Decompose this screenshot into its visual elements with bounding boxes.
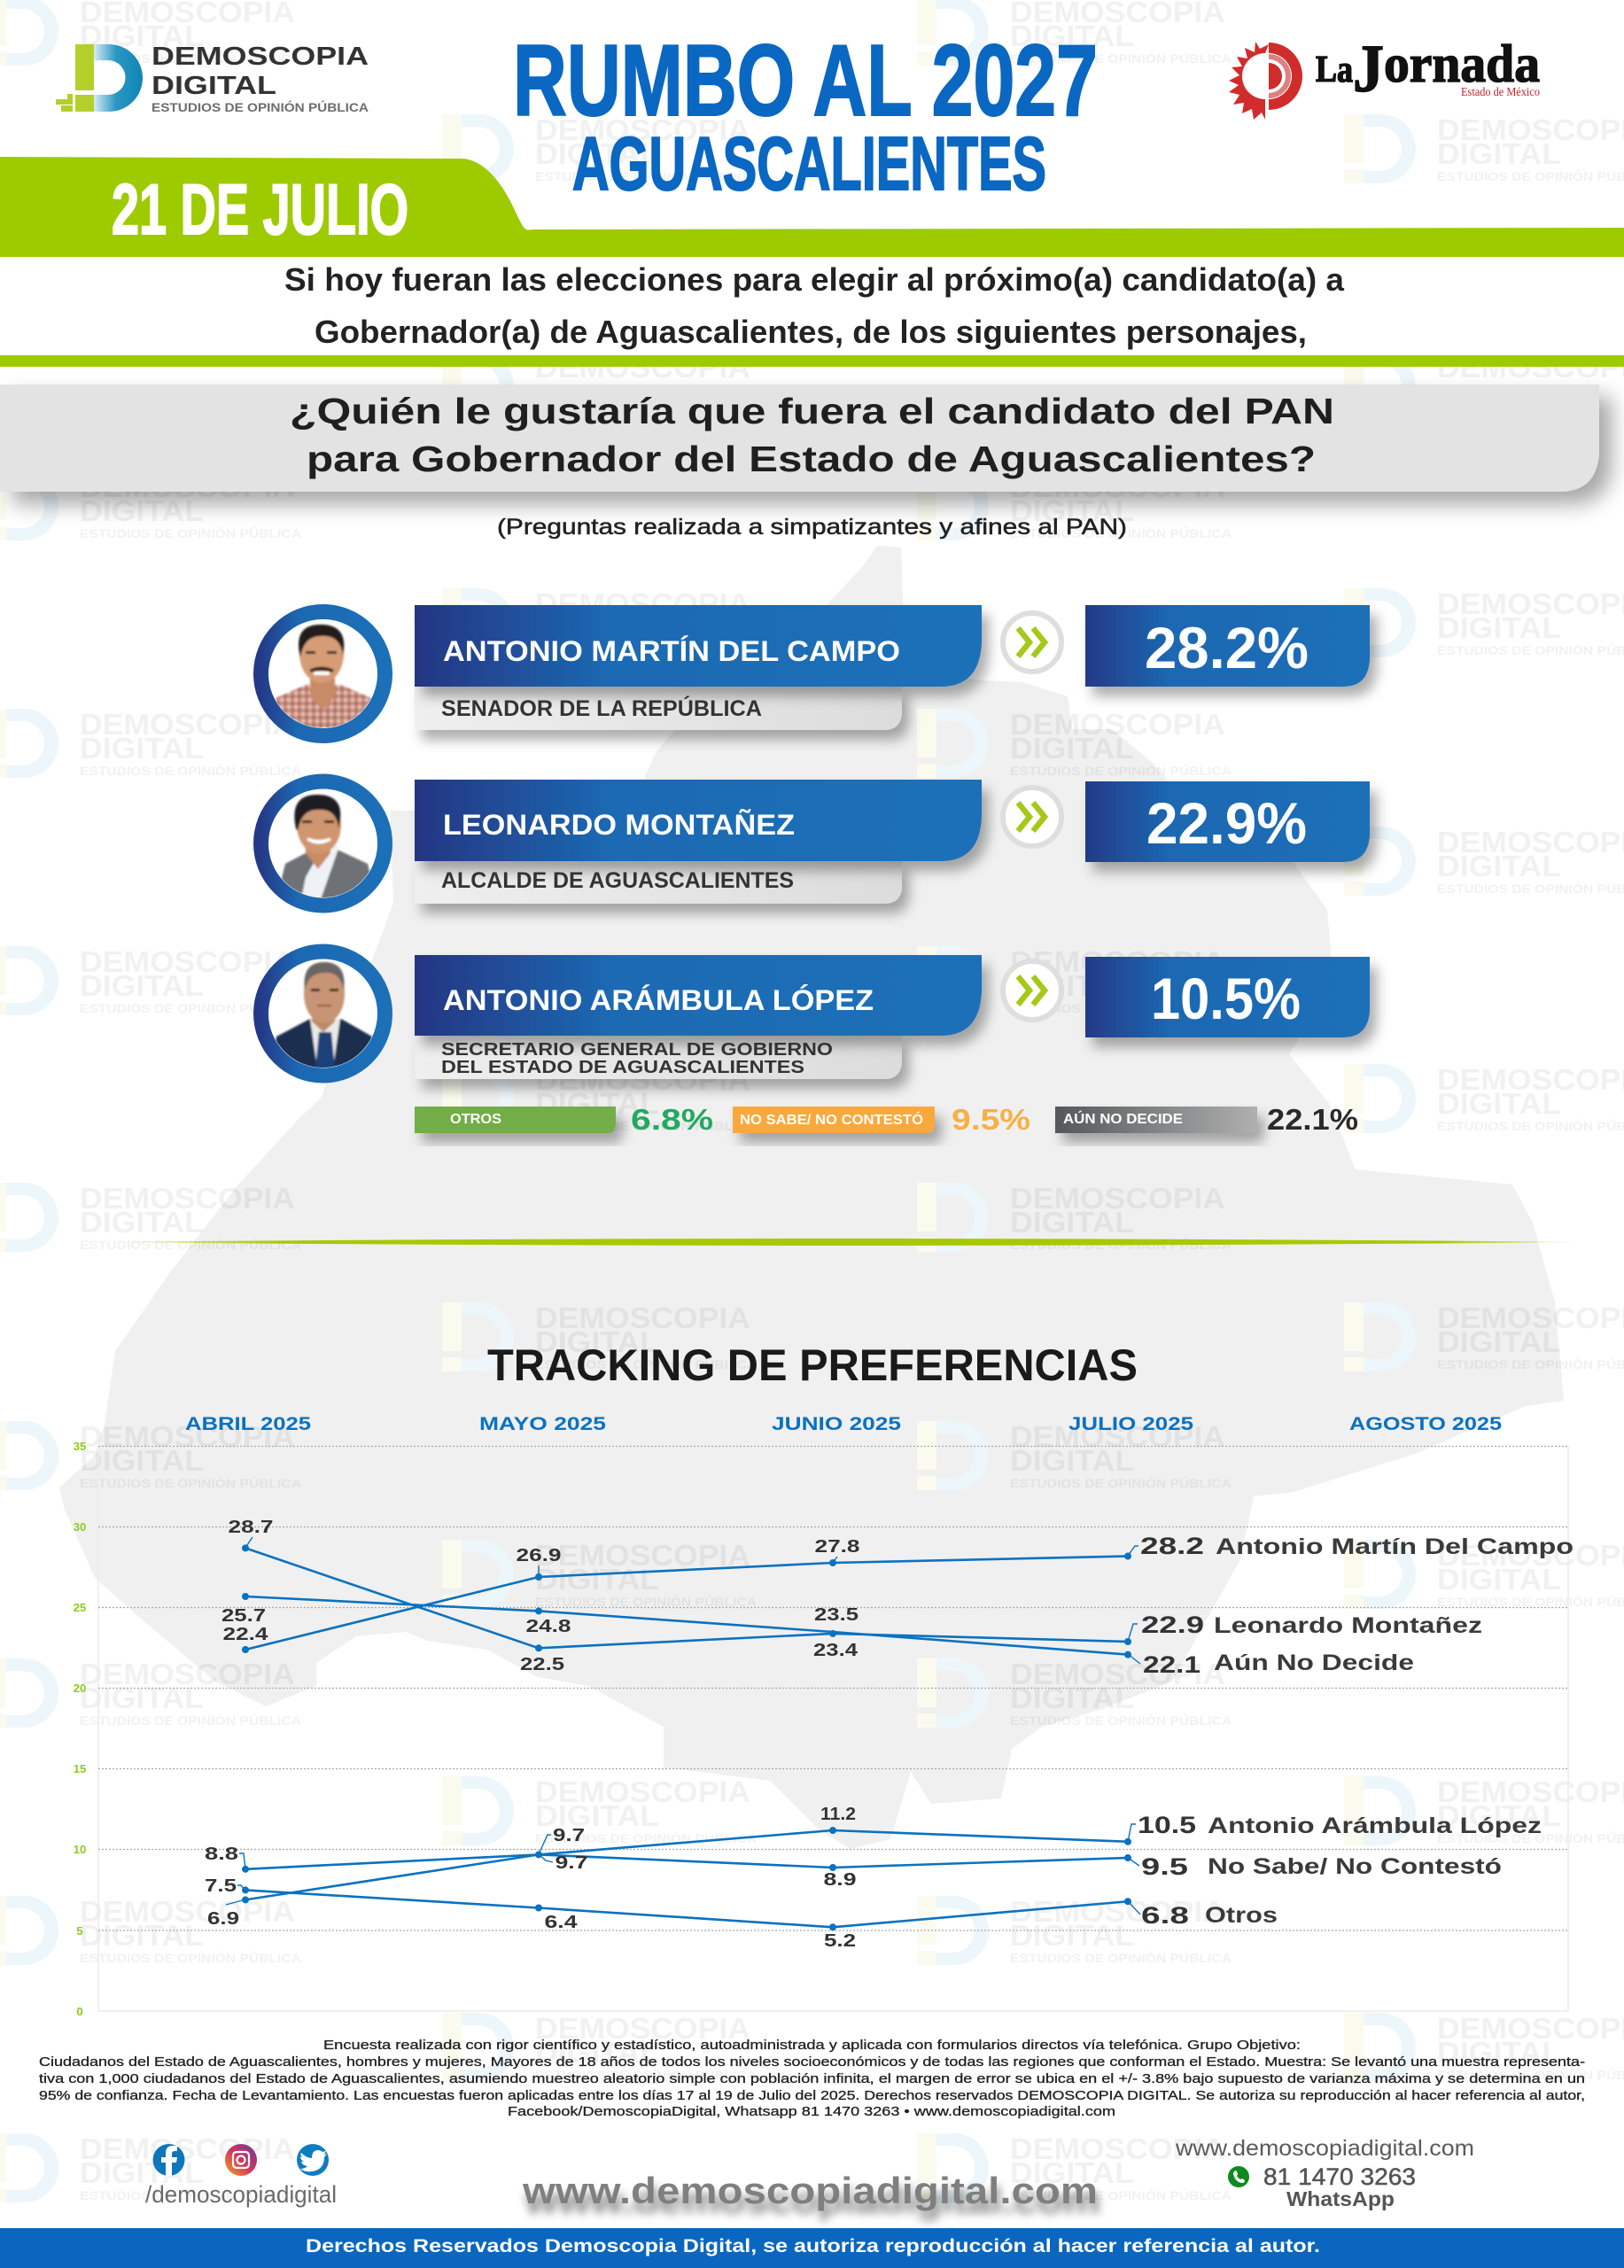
methodology note — [39, 2039, 1585, 2119]
text: ESTUDIOS DE OPINIÓN PÚBLICA — [80, 50, 301, 66]
date: 21 DE JULIO — [112, 170, 408, 250]
percentage — [1085, 957, 1370, 1037]
intro text: Gobernador(a) de Aguascalientes, de los siguientes personajes, — [315, 314, 1307, 350]
text: DIGITAL — [1437, 850, 1561, 882]
text: DIGITAL — [80, 2156, 204, 2189]
percentage — [1085, 605, 1370, 687]
series labels: 28.2 — [1140, 1533, 1204, 1559]
date tab and green band — [0, 157, 1624, 257]
text: DIGITAL — [535, 611, 659, 644]
text: ESTUDIOS DE OPINIÓN PÚBLICA — [1010, 1475, 1232, 1490]
otros — [415, 1103, 713, 1136]
y axis labels: 10 — [74, 1843, 86, 1856]
other responses legend — [415, 1103, 1358, 1136]
percentage: 10.5% — [1151, 966, 1301, 1031]
text: DIGITAL — [1437, 2036, 1561, 2069]
percentage: 28.2% — [1145, 615, 1309, 680]
logo: Demoscopia Digital: DIGITAL — [152, 72, 276, 100]
month headers: JULIO 2025 — [1068, 1414, 1193, 1434]
question text: ¿Quién le gustaría que fuera el candidato del PAN — [290, 391, 1334, 431]
text: DIGITAL — [1010, 19, 1134, 52]
aun no decide: AÚN NO DECIDE — [1063, 1110, 1183, 1127]
otros: 6.8% — [631, 1103, 713, 1136]
text: DEMOSCOPIA — [1010, 1182, 1225, 1215]
text: ESTUDIOS DE OPINIÓN PÚBLICA — [535, 642, 757, 657]
name bar: ANTONIO ARÁMBULA LÓPEZ — [443, 984, 874, 1016]
text: ESTUDIOS DE OPINIÓN PÚBLICA — [1010, 1950, 1232, 1965]
logo: Demoscopia Digital — [56, 43, 369, 114]
text: DEMOSCOPIA — [1010, 2132, 1225, 2165]
chevron icon — [1003, 613, 1061, 672]
text: ESTUDIOS DE OPINIÓN PÚBLICA — [1010, 2187, 1232, 2202]
text: DIGITAL — [535, 1799, 659, 1832]
chevron icon — [1003, 961, 1061, 1020]
text: ESTUDIOS DE OPINIÓN PÚBLICA — [80, 1713, 301, 1728]
series labels: Leonardo Montañez — [1214, 1613, 1482, 1638]
name bar — [415, 780, 982, 904]
data labels: 23.4 — [813, 1641, 859, 1660]
text: DEMOSCOPIA — [535, 1301, 750, 1334]
text: DEMOSCOPIA — [535, 1539, 750, 1572]
text: ESTUDIOS DE OPINIÓN PÚBLICA — [80, 1237, 301, 1252]
text: DIGITAL — [1437, 1799, 1561, 1832]
name bar — [415, 605, 982, 730]
logo: Demoscopia Digital: DEMOSCOPIA — [152, 43, 369, 71]
text: DEMOSCOPIA — [535, 1063, 750, 1096]
month headers: AGOSTO 2025 — [1349, 1414, 1502, 1434]
text: DIGITAL — [1010, 1444, 1134, 1477]
name bar: DEL ESTADO DE AGUASCALIENTES — [441, 1058, 804, 1077]
text: DEMOSCOPIA — [80, 2132, 295, 2165]
text: DIGITAL — [535, 137, 659, 170]
contact block — [1175, 2136, 1474, 2210]
series labels: 10.5 — [1138, 1812, 1196, 1838]
logo: La Jornada — [1229, 32, 1540, 120]
text: DIGITAL — [1010, 1206, 1134, 1239]
text: DIGITAL — [80, 494, 204, 527]
text: DEMOSCOPIA — [535, 1775, 750, 1808]
icon: whatsapp — [1228, 2166, 1249, 2187]
data labels: 27.8 — [815, 1537, 859, 1557]
text: DIGITAL — [535, 2036, 659, 2069]
portrait: Antonio Arámbula López — [260, 951, 385, 1076]
text: DIGITAL — [80, 1682, 204, 1714]
logo: Demoscopia Digital: ESTUDIOS DE OPINIÓN PÚBLICA — [152, 99, 369, 114]
text: DEMOSCOPIA — [80, 945, 295, 978]
data labels: 22.4 — [223, 1625, 269, 1644]
data labels: 8.9 — [824, 1870, 856, 1890]
text: ESTUDIOS DE OPINIÓN PÚBLICA — [1010, 525, 1232, 540]
data labels: 9.7 — [555, 1853, 588, 1873]
series labels: Antonio Martín Del Campo — [1216, 1534, 1573, 1559]
series labels: 6.8 — [1141, 1902, 1189, 1929]
social icons — [152, 2144, 329, 2176]
text: ESTUDIOS DE OPINIÓN PÚBLICA — [1010, 50, 1232, 66]
footer bar — [0, 2228, 1624, 2268]
social handle: /demoscopiadigital — [145, 2181, 337, 2208]
intro text: Si hoy fueran las elecciones para elegir al próximo(a) candidato(a) a — [284, 261, 1345, 298]
y axis labels: 35 — [74, 1440, 86, 1453]
text: DIGITAL — [535, 1325, 659, 1358]
text: DIGITAL — [1010, 494, 1134, 527]
percentage — [1085, 781, 1370, 862]
text: ESTUDIOS DE OPINIÓN PÚBLICA — [535, 2067, 757, 2082]
text: DEMOSCOPIA — [1010, 1895, 1225, 1928]
text: DEMOSCOPIA — [535, 587, 750, 620]
month headers: ABRIL 2025 — [185, 1414, 311, 1434]
text: DIGITAL — [535, 1563, 659, 1596]
data labels: 9.7 — [553, 1826, 585, 1845]
text: ESTUDIOS DE OPINIÓN PÚBLICA — [1010, 1000, 1232, 1015]
text: DEMOSCOPIA — [80, 1658, 295, 1690]
series labels: Aún No Decide — [1214, 1651, 1414, 1675]
question text: para Gobernador del Estado de Aguascalientes? — [307, 439, 1316, 479]
text: ESTUDIOS DE OPINIÓN PÚBLICA — [80, 1950, 301, 1965]
name bar — [415, 955, 982, 1079]
data labels: 8.8 — [205, 1845, 238, 1864]
text: ESTUDIOS DE OPINIÓN PÚBLICA — [535, 168, 757, 183]
text: ESTUDIOS DE OPINIÓN PÚBLICA — [80, 2187, 301, 2202]
logo: La Jornada: La — [1316, 50, 1353, 90]
series labels: Otros — [1205, 1903, 1278, 1928]
text: ESTUDIOS DE OPINIÓN PÚBLICA — [535, 881, 757, 896]
no sabe — [733, 1103, 1030, 1136]
text: DIGITAL — [535, 1087, 659, 1120]
series labels: 22.1 — [1143, 1651, 1201, 1678]
text: DIGITAL — [1437, 1087, 1561, 1120]
data labels: 5.2 — [824, 1931, 856, 1951]
question text — [290, 391, 1334, 479]
website large: www.demoscopiadigital.com — [522, 2170, 1098, 2211]
data labels: 28.7 — [229, 1518, 273, 1537]
portrait: Antonio Martín del Campo — [260, 611, 385, 735]
candidate 1 — [260, 605, 1370, 735]
portrait: Leonardo Montañez — [260, 781, 385, 905]
text: ESTUDIOS DE OPINIÓN PÚBLICA — [1010, 1237, 1232, 1252]
methodology note: Ciudadanos del Estado de Aguascalientes, hombres y mujeres, Mayores de 18 años de todos los niveles socioeconómicos y de todas las regiones que conforman el Estado. Muestra: Se levantó una muestra representa- — [39, 2055, 1585, 2070]
logo: La Jornada: ornada — [1384, 35, 1540, 93]
candidate 3 — [260, 951, 1370, 1079]
name bar: SECRETARIO GENERAL DE GOBIERNO — [441, 1040, 833, 1060]
data labels: 7.5 — [205, 1876, 237, 1896]
name bar: ALCALDE DE AGUASCALIENTES — [441, 868, 794, 893]
text: ESTUDIOS DE OPINIÓN PÚBLICA — [80, 1475, 301, 1490]
text: DIGITAL — [1010, 969, 1134, 1002]
text: DIGITAL — [80, 1919, 204, 1952]
contact block: www.demoscopiadigital.com — [1175, 2136, 1474, 2161]
data labels: 23.5 — [814, 1605, 859, 1625]
data labels: 6.4 — [544, 1913, 579, 1932]
text: DIGITAL — [80, 969, 204, 1002]
text: DIGITAL — [1010, 1682, 1134, 1714]
intro text — [284, 261, 1345, 350]
text: DEMOSCOPIA — [80, 1895, 295, 1928]
y axis labels: 5 — [76, 1924, 83, 1938]
text: ESTUDIOS DE OPINIÓN PÚBLICA — [535, 1118, 757, 1133]
text: DIGITAL — [80, 732, 204, 765]
no sabe: 9.5% — [952, 1103, 1030, 1136]
text: DEMOSCOPIA — [1010, 1420, 1225, 1453]
icon: twitter — [297, 2144, 329, 2176]
text: ESTUDIOS DE OPINIÓN PÚBLICA — [1010, 763, 1232, 778]
text: DEMOSCOPIA — [1010, 1658, 1225, 1690]
text: DEMOSCOPIA — [80, 470, 295, 503]
month headers: MAYO 2025 — [479, 1414, 606, 1434]
question note: (Preguntas realizada a simpatizantes y afines al PAN) — [497, 515, 1127, 540]
text: DIGITAL — [1010, 732, 1134, 765]
title: Rumbo al 2027: RUMBO AL 2027 — [513, 25, 1098, 137]
text: DIGITAL — [535, 850, 659, 882]
methodology note: 95% de confianza. Fecha de Levantamiento. Las encuestas fueron aplicadas entre los días 17 al 19 de Julio del 2025. Derechos reservados DEMOSCOPIA DIGITAL. Se autoriza su reproducción al hacer referencia al autor, — [39, 2089, 1585, 2103]
text: DEMOSCOPIA — [535, 351, 750, 384]
footer bar: Derechos Reservados Demoscopia Digital, se autoriza reproducción al hacer referencia al autor. — [306, 2236, 1320, 2256]
aun no decide: 22.1% — [1267, 1103, 1358, 1136]
month headers — [185, 1414, 1502, 1434]
icon: instagram — [225, 2144, 257, 2176]
data labels: 24.8 — [526, 1617, 571, 1636]
text: DIGITAL — [1437, 611, 1561, 644]
text: DEMOSCOPIA — [1010, 945, 1225, 978]
map silhouette background — [59, 546, 1564, 1849]
series labels: No Sabe/ No Contestó — [1208, 1854, 1502, 1879]
data labels: 22.5 — [520, 1655, 564, 1674]
text: ESTUDIOS DE OPINIÓN PÚBLICA — [80, 525, 301, 540]
y axis labels: 0 — [76, 2005, 83, 2018]
data labels: 25.7 — [221, 1606, 266, 1626]
text: DIGITAL — [80, 1444, 204, 1477]
text: DIGITAL — [1437, 1563, 1561, 1596]
text: DEMOSCOPIA — [535, 2012, 750, 2045]
methodology note: Facebook/DemoscopiaDigital, Whatsapp 81 1470 3263 • www.demoscopiadigital.com — [508, 2105, 1115, 2119]
data labels: 26.9 — [516, 1546, 562, 1565]
data labels — [205, 1518, 859, 1951]
text: DEMOSCOPIA — [80, 1420, 295, 1453]
data labels: 11.2 — [820, 1805, 856, 1824]
y axis labels: 30 — [74, 1520, 86, 1534]
logo: La Jornada: Estado de México — [1461, 86, 1540, 99]
y axis labels — [74, 1440, 86, 2018]
text: DIGITAL — [1010, 2156, 1134, 2189]
text: DEMOSCOPIA — [80, 1182, 295, 1215]
text: DIGITAL — [80, 19, 204, 52]
text: DIGITAL — [1437, 137, 1561, 170]
lines upper group — [242, 1537, 1140, 1664]
text: DEMOSCOPIA — [1010, 708, 1225, 741]
series labels — [1138, 1533, 1573, 1929]
methodology note: tiva con 1,000 ciudadanos del Estado de Aguascalientes, asumiendo muestreo aleatorio simple con población infinita, el margen de error se ubica en el +/- 3.8% bajo supuesto de varianza máxima y se determina en un — [39, 2072, 1585, 2086]
lines lower group — [226, 1824, 1140, 1930]
y axis labels: 25 — [74, 1601, 86, 1614]
text: ESTUDIOS DE OPINIÓN PÚBLICA — [80, 763, 301, 778]
question panel — [0, 384, 1599, 492]
aun no decide — [1055, 1103, 1358, 1136]
candidate 2 — [260, 780, 1370, 905]
contact block: 81 1470 3263 — [1263, 2163, 1416, 2190]
y axis labels: 20 — [74, 1682, 86, 1695]
tracking line chart — [74, 1414, 1573, 2018]
text: DEMOSCOPIA — [1010, 470, 1225, 503]
text: ESTUDIOS DE OPINIÓN PÚBLICA — [535, 1356, 757, 1371]
text: ESTUDIOS DE OPINIÓN PÚBLICA — [1010, 1713, 1232, 1728]
text: DIGITAL — [1437, 1325, 1561, 1358]
percentage: 22.9% — [1146, 790, 1307, 856]
logo: La Jornada: J — [1353, 32, 1384, 106]
contact block: WhatsApp — [1286, 2187, 1395, 2210]
otros: OTROS — [450, 1112, 501, 1127]
data labels: 6.9 — [207, 1909, 239, 1929]
text: DIGITAL — [1010, 1919, 1134, 1952]
subtitle: Aguascalientes: AGUASCALIENTES — [572, 122, 1046, 206]
month headers: JUNIO 2025 — [772, 1414, 901, 1434]
text: DEMOSCOPIA — [80, 708, 295, 741]
no sabe: NO SABE/ NO CONTESTÓ — [740, 1111, 923, 1128]
name bar: LEONARDO MONTAÑEZ — [443, 809, 795, 841]
text: ESTUDIOS DE OPINIÓN PÚBLICA — [535, 1594, 757, 1609]
chevron icon — [1003, 788, 1061, 846]
series labels: 22.9 — [1141, 1612, 1204, 1638]
icon: facebook — [152, 2144, 184, 2176]
text: DIGITAL — [80, 1206, 204, 1239]
text: ESTUDIOS DE OPINIÓN PÚBLICA — [80, 1000, 301, 1015]
series labels: Antonio Arámbula López — [1208, 1814, 1542, 1838]
text: ESTUDIOS DE OPINIÓN PÚBLICA — [535, 1830, 757, 1845]
text: DEMOSCOPIA — [535, 826, 750, 858]
heading: tracking: TRACKING DE PREFERENCIAS — [487, 1340, 1138, 1390]
methodology note: Encuesta realizada con rigor científico y estadístico, autoadministrada y aplicada con formularios directos vía telefónica. Grupo Objetivo: — [323, 2039, 1301, 2053]
text: DEMOSCOPIA — [535, 113, 750, 146]
name bar: SENADOR DE LA REPÚBLICA — [441, 695, 762, 721]
name bar: ANTONIO MARTÍN DEL CAMPO — [443, 635, 900, 667]
y axis labels: 15 — [74, 1762, 86, 1775]
series labels: 9.5 — [1141, 1853, 1188, 1880]
